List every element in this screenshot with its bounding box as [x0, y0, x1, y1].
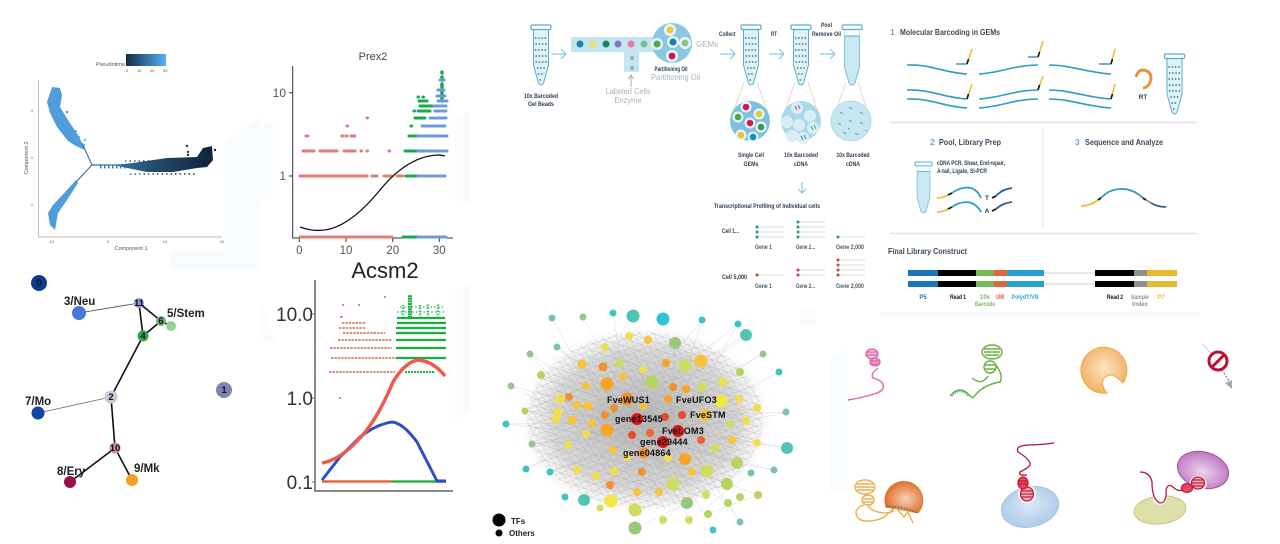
node size legend — [492, 514, 535, 538]
panel: 10x workflow diagram — [524, 22, 871, 193]
node 3/Neu — [64, 296, 95, 320]
icon: purple and olive subunits with red strand — [1133, 446, 1233, 527]
axes: Component 2 — [24, 141, 30, 175]
trajectory: lower branch — [48, 165, 92, 230]
tube: single cell GEMs — [741, 25, 761, 85]
axes and ticks: 10 — [273, 86, 286, 100]
axes: Component 1 — [114, 246, 148, 252]
smooth trend line — [300, 155, 445, 230]
orange scatter points — [329, 297, 396, 398]
axes and ticks: 20 — [386, 245, 399, 257]
panel: Acsm2 expression plot — [276, 258, 453, 494]
axes and ticks: 0.1 — [287, 473, 313, 494]
panel: sequence and analyze — [1075, 137, 1166, 207]
gel bead tube: Gel Beads — [528, 101, 554, 108]
title: Prex2 — [359, 51, 387, 63]
magnified: barcoded cDNA in droplets — [781, 101, 821, 168]
protocol text: cDNA PCR, Shear, End-repair, — [937, 161, 1005, 167]
axes: 10 — [163, 239, 168, 244]
segment labels: 10x — [980, 295, 991, 301]
heading: 2 — [930, 137, 935, 147]
adapter letters — [985, 196, 990, 215]
node 9/Mk: 9/Mk — [134, 463, 160, 475]
row: cell 1: Cell 1... — [722, 228, 739, 235]
gene labels — [607, 395, 726, 458]
row: cell 1: Gene 2... — [796, 244, 815, 251]
node 0: 0 — [36, 278, 42, 289]
gene labels: FveSTM — [690, 410, 726, 420]
legend: pseudotime colour bar: 30 — [163, 68, 168, 73]
node 5/Stem: 5/Stem — [167, 308, 205, 320]
icon: pink RNA hairpin — [848, 349, 883, 400]
panel: final library construct — [888, 246, 1177, 308]
panel: molecular illustrations — [848, 344, 1233, 533]
row: cell 5000 — [722, 258, 865, 290]
magnified: pooled cDNA: cDNA — [846, 161, 860, 168]
magnified: single cell GEMs: GEMs — [744, 161, 759, 168]
network edges — [506, 313, 787, 530]
row: cell 5000: Gene 2... — [796, 283, 815, 290]
panel: pool and library prep — [915, 137, 1012, 215]
partitioning oil labels: Partitioning Oil — [654, 66, 688, 73]
trajectory: upper branch — [47, 87, 92, 165]
row: cell 1: Gene 2,000 — [836, 244, 864, 251]
adapter letters: T — [985, 196, 989, 202]
node 8/Ery — [57, 466, 86, 488]
barcode primers — [967, 41, 1115, 99]
panel: pseudotime trajectory plot — [24, 54, 225, 252]
axes — [24, 80, 225, 252]
baseline points — [322, 480, 446, 483]
RT enzyme: RT — [1139, 94, 1147, 101]
row: cell 5000: Gene 2,000 — [836, 283, 864, 290]
axes: 0 — [31, 155, 34, 160]
tube: barcoded cDNA — [791, 25, 811, 85]
step labels: Remove Oil — [812, 31, 841, 38]
title: Acsm2 — [351, 258, 419, 283]
magnified: single cell GEMs — [730, 101, 770, 168]
step labels: RT — [771, 31, 777, 38]
axes and ticks: 30 — [433, 245, 446, 257]
axes and ticks: 1 — [279, 169, 286, 183]
node 4 — [138, 330, 148, 342]
GEMs droplet circle: GEMs — [696, 40, 718, 49]
legend: pseudotime colour bar — [96, 54, 168, 73]
legend: pseudotime colour bar: 0 — [126, 68, 129, 73]
network nodes — [502, 310, 793, 534]
tree edges — [38, 303, 171, 482]
segment labels — [919, 295, 1165, 308]
strand bars — [908, 270, 1177, 287]
axes: -4 — [29, 202, 34, 207]
arrows between tubes — [720, 49, 835, 59]
node 2: 2 — [108, 392, 114, 403]
tube — [915, 162, 932, 213]
axes: 4 — [31, 108, 34, 113]
protocol text: A-tail, Ligate, SI-PCR — [937, 169, 988, 175]
step labels: Collect — [719, 31, 736, 38]
step labels: Pool — [821, 22, 832, 29]
node 7/Mo — [25, 396, 51, 420]
legend: pseudotime colour bar: 20 — [150, 68, 155, 73]
reagent tube — [1164, 54, 1184, 114]
blue fitted curve — [322, 422, 446, 481]
gene labels: FveUFO3 — [676, 395, 717, 405]
heading: Sequence and Analyze — [1085, 137, 1163, 147]
axes and ticks: 10.0 — [276, 305, 313, 326]
RT enzyme — [1136, 70, 1151, 101]
sequencing strand — [1081, 189, 1166, 207]
row: cell 1: Gene 1 — [755, 244, 772, 251]
panel: state tree graph — [25, 275, 232, 488]
partitioning oil labels: Partitioning Oil — [651, 73, 700, 82]
segment labels: Read 2 — [1107, 295, 1124, 301]
magnified: pooled cDNA — [831, 101, 871, 168]
node 1 — [216, 382, 232, 398]
node 6: 6 — [158, 316, 164, 327]
gene labels: gene29444 — [640, 437, 688, 447]
panel: gene regulatory network — [492, 310, 793, 538]
tube: pooled — [842, 25, 862, 85]
axes and ticks: 0 — [296, 245, 303, 257]
icon: blue ribosome subunit with red hairpin — [997, 443, 1063, 533]
icon: blocked arrow — [1202, 344, 1232, 389]
labeled cells input — [606, 75, 650, 105]
row: cell 5000: Gene 1 — [755, 283, 772, 290]
segment labels: PolydT/VN — [1012, 295, 1038, 301]
axes: 0 — [107, 239, 110, 244]
icon: green hairpin with primer — [950, 345, 1002, 398]
connector lines — [733, 82, 868, 113]
axes and ticks: 1.0 — [287, 389, 313, 410]
down arrow — [798, 182, 806, 193]
arrow — [552, 49, 566, 59]
node 0 — [31, 275, 47, 291]
trajectory: right branch — [92, 145, 216, 174]
heading: 1 — [890, 27, 895, 37]
node 10: 10 — [110, 443, 120, 454]
segment labels: UMI — [996, 295, 1005, 301]
heading: 3 — [1075, 137, 1080, 147]
red scatter points — [300, 118, 403, 237]
segment labels: Barcode — [975, 302, 996, 308]
axes: 20 — [220, 239, 225, 244]
node 11: 11 — [134, 298, 145, 309]
axes: -10 — [48, 239, 55, 244]
node 6 — [156, 316, 166, 327]
axes and ticks — [276, 280, 453, 494]
segment labels: Index — [1132, 302, 1148, 308]
heading: Molecular Barcoding in GEMs — [900, 27, 1000, 37]
cDNA strands — [907, 57, 1111, 108]
gel bead tube — [524, 25, 558, 108]
row: cell 1 — [722, 220, 865, 251]
gel bead tube: 10x Barcoded — [524, 93, 558, 100]
node 3/Neu: 3/Neu — [64, 296, 95, 308]
panel: Prex2 expression plot — [273, 51, 453, 257]
node 9/Mk — [126, 463, 160, 486]
step labels — [719, 22, 841, 38]
green scatter points — [396, 295, 446, 372]
segment labels: P5 — [919, 295, 927, 301]
gene labels: gene13545 — [615, 414, 663, 424]
segment labels: Sample — [1131, 295, 1150, 301]
GEMs droplet circle — [651, 23, 718, 63]
divider lines — [890, 122, 1197, 234]
gene labels: FveWUS1 — [607, 395, 650, 405]
gene labels: gene04864 — [623, 448, 671, 458]
axes and ticks — [273, 66, 453, 257]
magnified: barcoded cDNA in droplets: 10x Barcoded — [784, 152, 818, 159]
legend: pseudotime colour bar: Pseudotime — [96, 62, 125, 68]
blue scatter points — [418, 80, 447, 237]
node size legend: TFs — [511, 517, 526, 526]
icon: orange enzyme — [1081, 347, 1127, 393]
labeled cells input: Enzyme — [614, 96, 642, 105]
gene labels: FveLOM3 — [662, 426, 704, 436]
library strands — [937, 188, 1012, 212]
node 1: 1 — [221, 385, 227, 396]
green scatter points — [403, 72, 442, 237]
heading: Transcriptional Profiling of Individual cells — [714, 203, 820, 210]
magnified: pooled cDNA: 10x Barcoded — [836, 152, 870, 159]
heading: Final Library Construct — [888, 246, 967, 256]
heading: Pool, Library Prep — [939, 137, 1001, 147]
node 8/Ery: 8/Ery — [57, 466, 86, 478]
panel: molecular barcoding in GEMs — [890, 27, 1184, 114]
red fitted curve — [322, 360, 445, 463]
protocol text — [937, 161, 1005, 175]
node size legend: Others — [509, 529, 535, 538]
legend: pseudotime colour bar: 10 — [137, 68, 142, 73]
magnified: single cell GEMs: Single Cell — [738, 152, 764, 159]
microfluidic channel — [571, 37, 655, 72]
segment labels: Read 1 — [950, 295, 967, 301]
labeled cells input: Labeled Cells — [606, 87, 650, 96]
adapter letters: A — [985, 209, 990, 215]
node 7/Mo: 7/Mo — [25, 396, 51, 408]
magnified: barcoded cDNA in droplets: cDNA — [794, 161, 808, 168]
panel: transcriptional profiling — [714, 203, 865, 290]
axes and ticks: 10 — [340, 245, 352, 257]
icon: yellow hairpin with orange enzyme — [855, 480, 923, 523]
row: cell 5000: Cell 5,000 — [722, 274, 747, 281]
node 4: 4 — [140, 331, 146, 342]
segment labels: P7 — [1157, 295, 1165, 301]
partitioning oil labels — [651, 66, 700, 82]
node 2 — [104, 390, 118, 404]
node 5/Stem — [166, 308, 205, 331]
